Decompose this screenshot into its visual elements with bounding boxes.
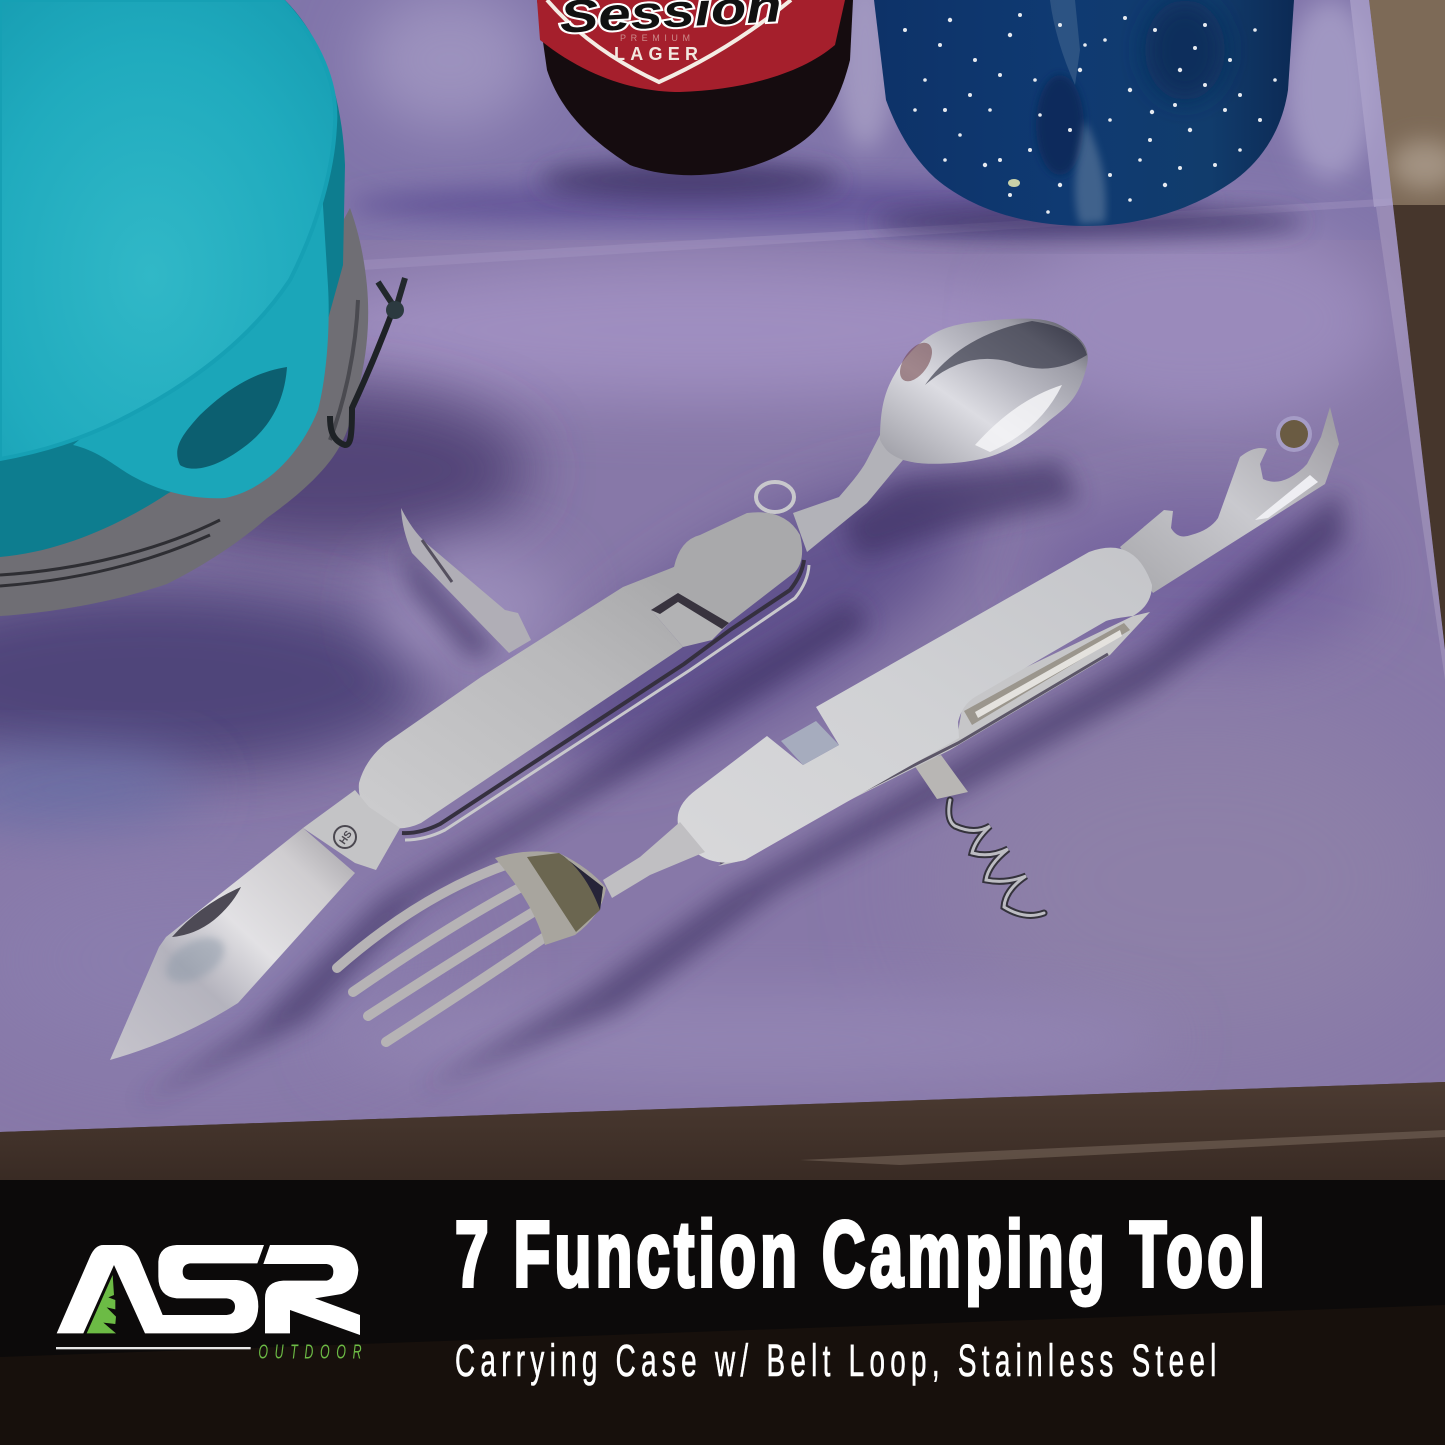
handle notch bbox=[651, 593, 729, 647]
awl blade bbox=[401, 508, 531, 653]
bowl handle bbox=[73, 190, 329, 498]
logo letter R bbox=[263, 1245, 360, 1335]
logo tree bbox=[87, 1275, 116, 1333]
mug speckles bbox=[903, 13, 1277, 214]
title: 7 Function Camping Tool bbox=[455, 1202, 1265, 1306]
outer rail under handle bbox=[718, 612, 1150, 866]
bottle label bbox=[537, 0, 845, 92]
beer bottle: LAGER bbox=[614, 44, 698, 64]
shadows under the tools bbox=[135, 460, 1345, 1105]
teal bowl with stacked plates bbox=[0, 0, 405, 616]
beer bottle: PREMIUM bbox=[620, 33, 690, 43]
upper tool: spoon, knife and awl bbox=[110, 319, 1088, 1060]
bolster mark: HS bbox=[338, 829, 355, 847]
spoon bowl bbox=[880, 319, 1088, 464]
opener hole bbox=[1276, 416, 1312, 452]
subtitle: Carrying Case w/ Belt Loop, Stainless Steel bbox=[455, 1335, 1216, 1386]
handle bbox=[359, 567, 729, 828]
handle hole bbox=[177, 367, 287, 469]
fork neck bbox=[603, 822, 705, 898]
beer bottle bbox=[537, 0, 853, 200]
spoon neck bbox=[793, 435, 903, 552]
bowl interior bbox=[0, 0, 335, 459]
corkscrew spiral bbox=[949, 800, 1044, 915]
handle notch bbox=[781, 721, 839, 765]
ASR Outdoor logo bbox=[56, 1245, 362, 1363]
drawstring cord bbox=[330, 310, 393, 445]
blade rails under handle bbox=[402, 560, 809, 840]
label chevron bbox=[547, 0, 791, 82]
bottom dark banner bbox=[0, 1180, 1445, 1445]
knife blade bbox=[110, 828, 355, 1060]
peeler slot bbox=[964, 623, 1130, 725]
fork tines bbox=[337, 864, 558, 1042]
wood front edge bbox=[0, 1082, 1445, 1185]
knife bolster bbox=[303, 790, 400, 870]
lower tool: fork, opener and corkscrew bbox=[337, 407, 1339, 1042]
key ring bbox=[756, 482, 794, 512]
logo rule bbox=[56, 1347, 251, 1349]
bottle opener bbox=[1120, 407, 1339, 593]
purple cutting board bbox=[0, 0, 1445, 1145]
logo letters A and S bbox=[57, 1245, 264, 1333]
mug reflections bbox=[1036, 75, 1084, 175]
handle bbox=[678, 548, 1152, 863]
bowl outer wall bbox=[0, 0, 345, 557]
gray stacked plates bbox=[0, 208, 368, 616]
blue enamel mug bbox=[874, 0, 1305, 238]
logo subtext: OUTDOOR bbox=[258, 1340, 362, 1363]
corkscrew shaft bbox=[914, 755, 968, 799]
fork head bbox=[495, 851, 606, 945]
handle cap bbox=[650, 512, 802, 623]
